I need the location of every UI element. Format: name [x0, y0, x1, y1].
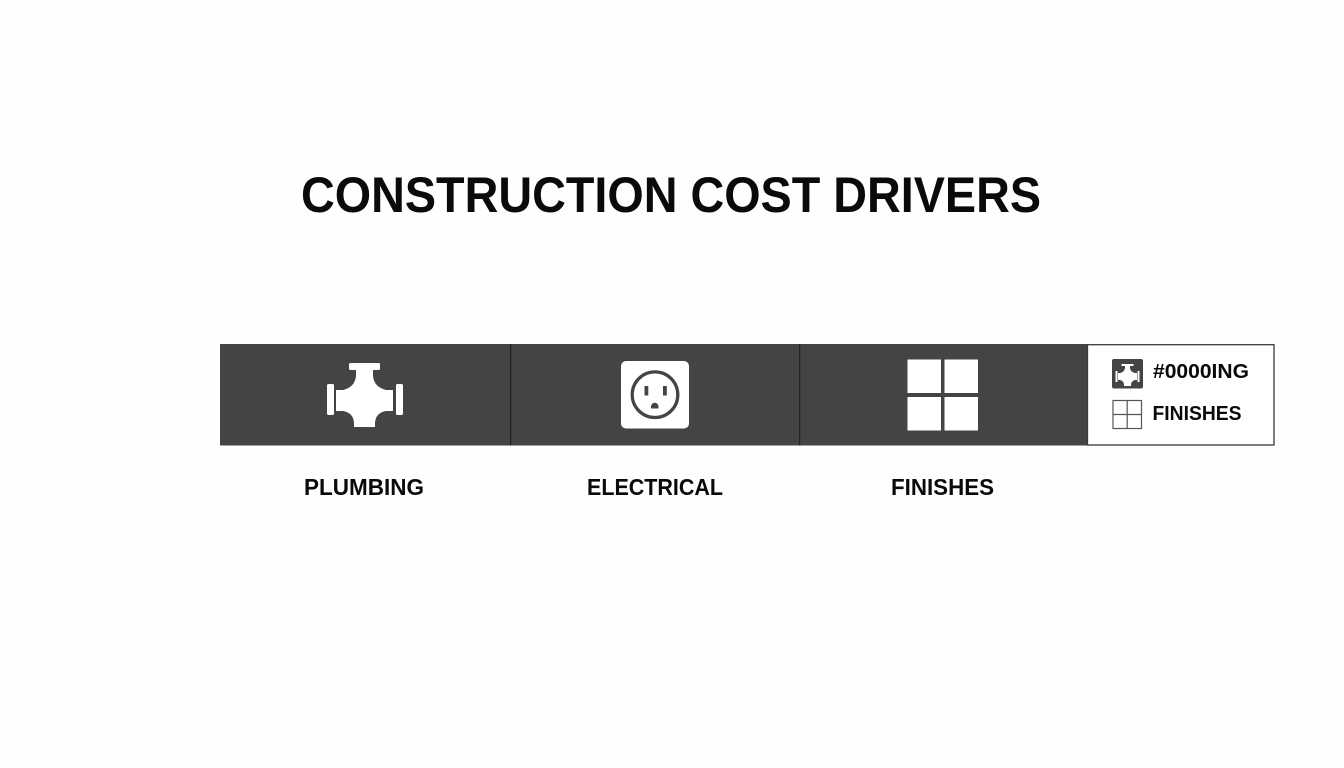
- label: electrical: ELECTRICAL: [587, 474, 723, 500]
- legend: [1088, 345, 1274, 445]
- panel: cost driver icon bar: [220, 344, 1088, 446]
- legend label: plumbing: #0000ING: [1153, 361, 1249, 383]
- title: CONSTRUCTION COST DRIVERS: [301, 167, 1041, 223]
- legend label: finishes: FINISHES: [1152, 403, 1242, 425]
- legend icon: finishes: [1113, 400, 1142, 428]
- label: plumbing: PLUMBING: [304, 474, 424, 500]
- icon: plumbing pipe fitting: [327, 363, 403, 427]
- icon: finishes tile grid: [908, 360, 978, 430]
- icon: electrical outlet: [621, 361, 689, 428]
- legend icon: plumbing: [1112, 359, 1143, 388]
- label: finishes: FINISHES: [891, 474, 994, 500]
